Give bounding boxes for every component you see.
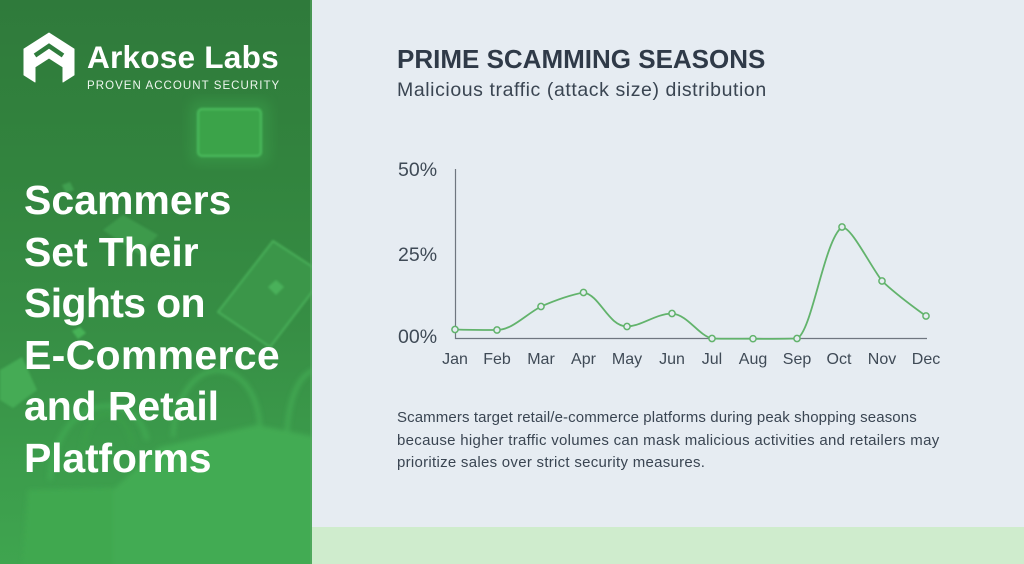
line chart: Feb [483,351,511,368]
logo: Arkose Labs [24,32,280,92]
main heading: Sights on [24,280,205,326]
line chart: May [612,351,642,368]
logo tagline: PROVEN ACCOUNT SECURITY [87,80,280,92]
main heading: E-Commerce [24,332,280,378]
line chart [398,159,940,368]
background illustration: cards and shopping bags [0,0,312,564]
line chart: Aug [739,351,767,368]
main heading: Platforms [24,434,211,480]
main heading: and Retail [24,383,219,429]
line chart: Jul [702,351,722,368]
line chart: Apr [571,351,597,368]
line chart: Oct [827,351,852,368]
main heading [24,177,280,480]
logo wordmark: Arkose Labs [87,39,279,75]
line chart: 00% [398,326,437,348]
line chart: 50% [398,159,437,181]
main heading: Scammers [24,177,231,223]
line chart: Sep [783,351,811,368]
description text: Scammers target retail/e-commerce platforms during peak shopping seasons [397,409,917,426]
chart subtitle: Malicious traffic (attack size) distribution [397,79,767,101]
line chart: Jun [659,351,685,368]
bottom light green band [312,527,1024,564]
line chart: Dec [912,351,940,368]
description text: prioritize sales over strict security measures. [397,454,705,471]
panel: left green panel [0,0,312,564]
description text [397,409,940,471]
line chart: Nov [868,351,896,368]
chart title: PRIME SCAMMING SEASONS [397,44,765,74]
description text: because higher traffic volumes can mask malicious activities and retailers may [397,432,940,448]
main heading: Set Their [24,228,199,274]
icon: Arkose shield [24,32,74,82]
line chart: Jan [442,351,468,368]
line chart: Mar [527,351,555,368]
line chart: 25% [398,244,437,266]
